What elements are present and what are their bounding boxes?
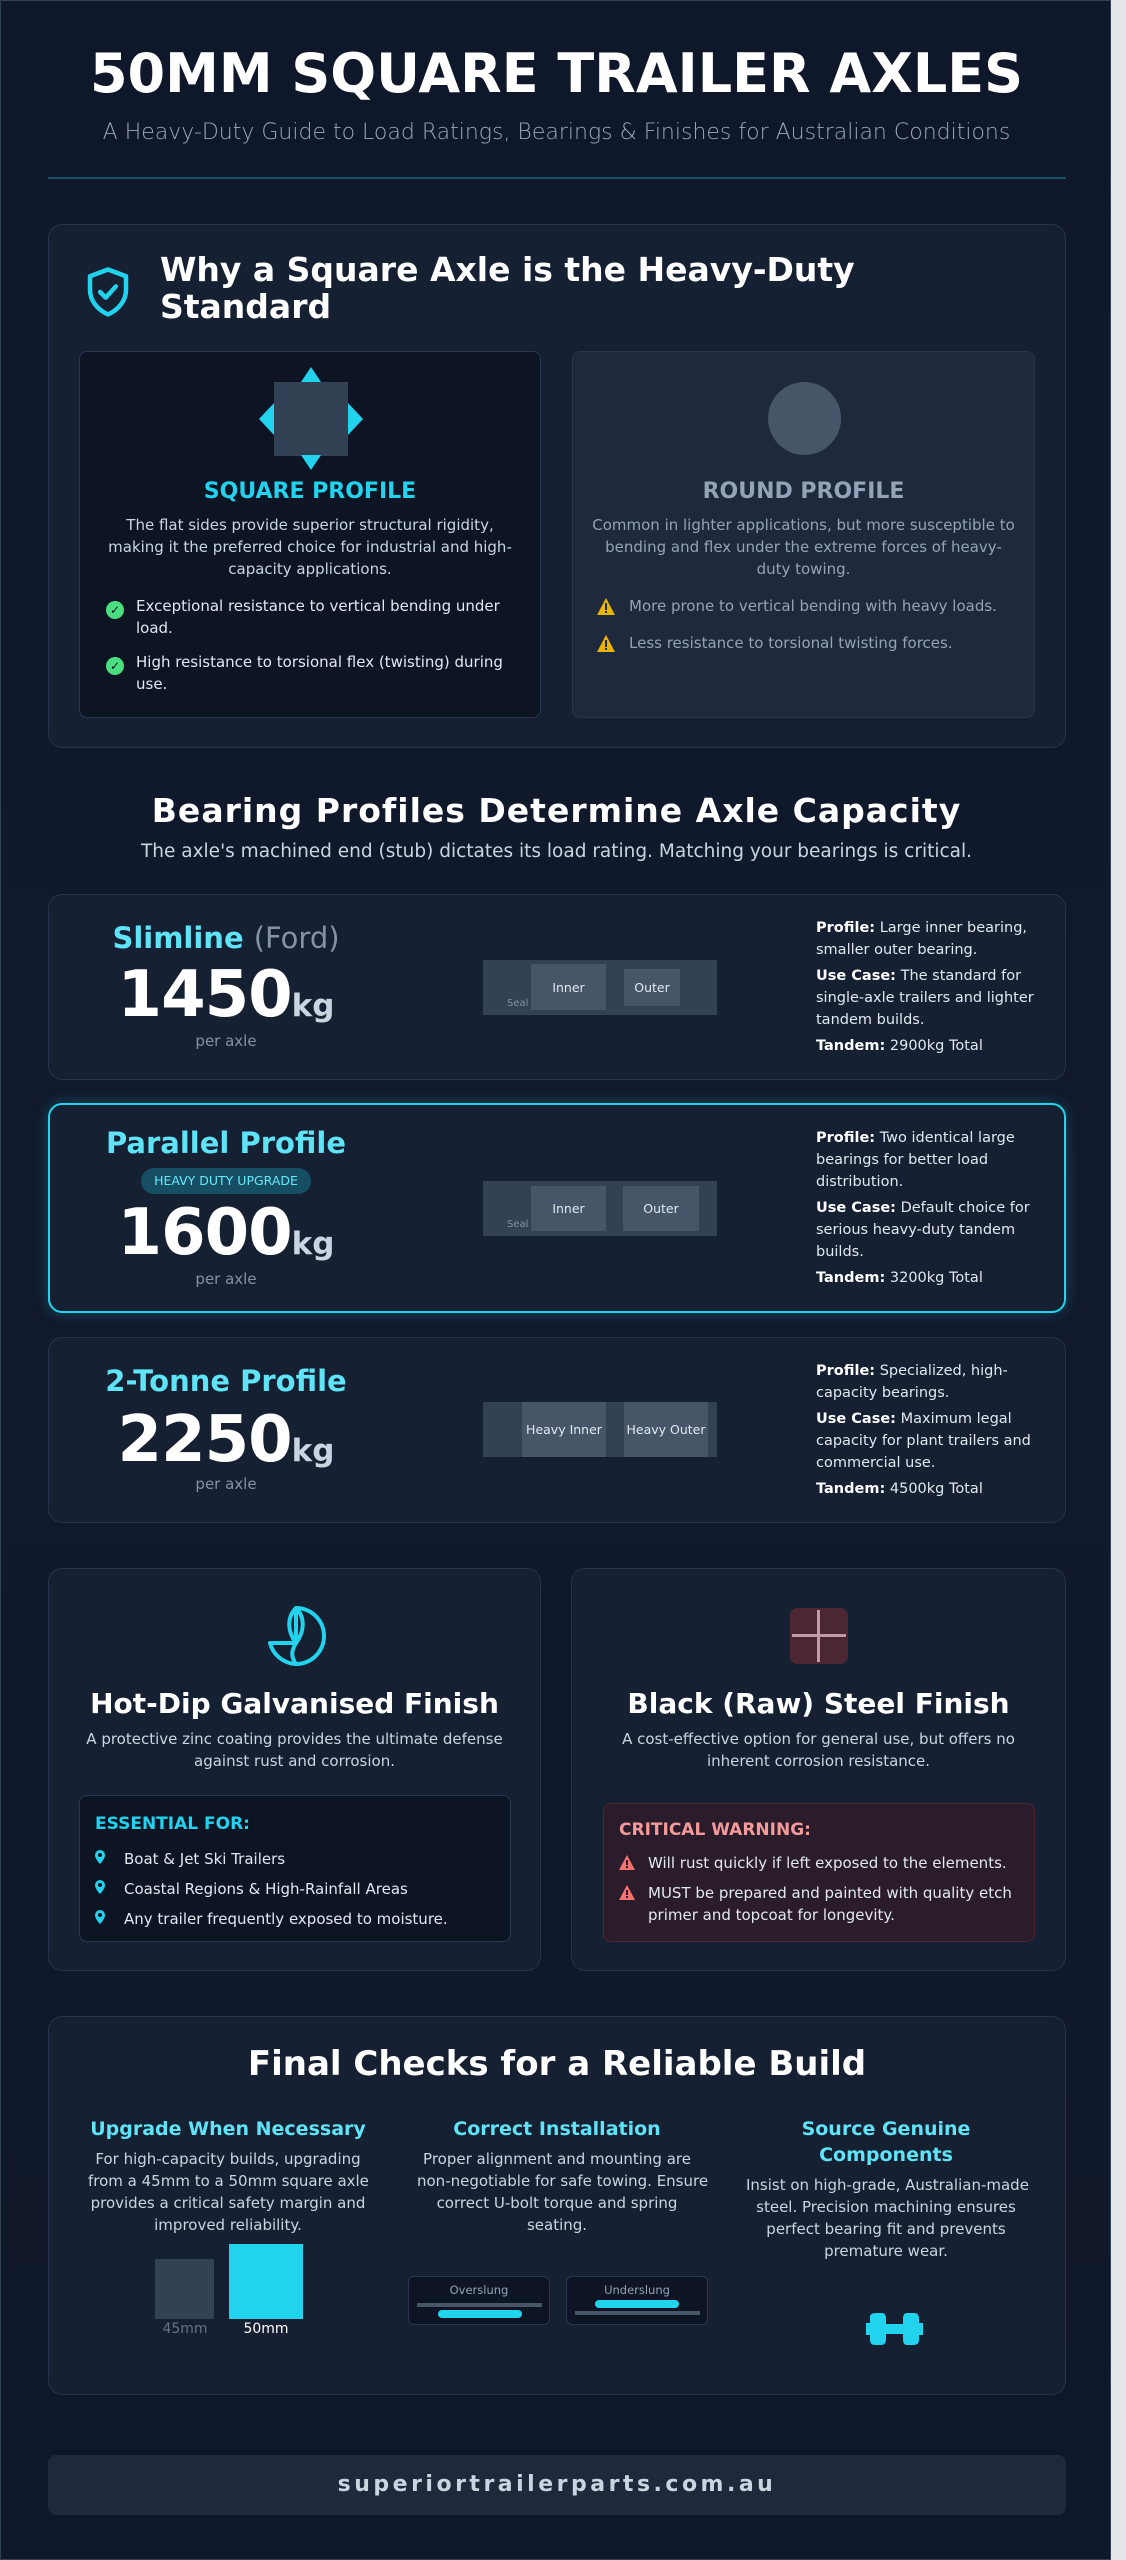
- box: essential for: [79, 1795, 511, 1942]
- text: Outer: [643, 1201, 679, 1216]
- text: smaller outer bearing. Use Case: The standard for: [816, 942, 1021, 984]
- heading: round profile: ROUND PROFILE: [703, 479, 904, 504]
- column: upgrade: For high-capacity builds, upgrading: [95, 2150, 361, 2168]
- panel: why square axle: [48, 224, 1066, 748]
- text: Heavy Inner: [526, 1422, 602, 1437]
- diagram: overslung: Overslung: [450, 2283, 508, 2297]
- icon: component: [866, 2313, 923, 2345]
- column: genuine: steel. Precision machining ensures: [756, 2198, 1016, 2216]
- text: 1600kg: [118, 1196, 334, 1270]
- diagram: overslung: [408, 2276, 550, 2325]
- text: single-axle trailers and lighter: [816, 990, 1034, 1006]
- bullets: [597, 597, 997, 652]
- badge: HEAVY DUTY UPGRADE: [154, 1173, 298, 1188]
- column: upgrade: provides a critical safety margin and: [91, 2194, 365, 2212]
- column: installation: Proper alignment and mounting are: [423, 2150, 691, 2168]
- icon: square with arrows: [259, 367, 363, 470]
- column: upgrade: [88, 2118, 369, 2337]
- column: genuine: Source Genuine: [802, 2118, 970, 2140]
- text: Slimline (Ford): [112, 921, 340, 955]
- text: The flat sides provide superior structural rigidity,: [126, 516, 494, 534]
- footer: superiortrailerparts.com.au: [338, 2472, 776, 2497]
- title: 50MM SQUARE TRAILER AXLES: [90, 42, 1023, 105]
- column: upgrade: Upgrade When Necessary: [90, 2118, 366, 2140]
- text: per axle: [195, 1032, 257, 1050]
- heading: Final Checks for a Reliable Build: [248, 2044, 866, 2084]
- column: genuine: Components: [819, 2144, 953, 2166]
- badge: [141, 1168, 311, 1194]
- text: inherent corrosion resistance.: [707, 1752, 930, 1770]
- diagram: Inner: [552, 980, 585, 994]
- column: genuine: Insist on high-grade, Australian-made: [746, 2176, 1029, 2194]
- text: making it the preferred choice for industrial and high-: [108, 538, 512, 556]
- heading: square profile: SQUARE PROFILE: [204, 479, 416, 504]
- column: installation: [408, 2118, 708, 2325]
- text: bending and flex under the extreme forces of heavy-: [605, 538, 1002, 556]
- bullets: [106, 597, 503, 693]
- column: genuine: premature wear.: [824, 2242, 948, 2260]
- text: builds. Tandem: 3200kg Total: [816, 1244, 983, 1286]
- text: A cost-effective option for general use, but offers no: [622, 1730, 1015, 1748]
- column: upgrade: from a 45mm to a 50mm square axle: [88, 2172, 369, 2190]
- bullets: Exceptional resistance to vertical bending under: [136, 597, 500, 615]
- heading: Standard: [160, 287, 331, 326]
- text: Parallel Profile: [106, 1126, 346, 1160]
- text: A protective zinc coating provides the ultimate defense: [86, 1730, 503, 1748]
- text: 2-Tonne Profile: [105, 1364, 347, 1398]
- bullets: load.: [136, 619, 173, 637]
- column: upgrade: 50mm: [243, 2321, 289, 2337]
- text: [108, 516, 512, 578]
- box: essential for: Coastal Regions & High-Rainfall Areas: [124, 1880, 408, 1898]
- text: Seal: [507, 1219, 528, 1230]
- column: installation: seating.: [527, 2216, 587, 2234]
- text: commercial use. Tandem: 4500kg Total: [816, 1455, 983, 1497]
- text: capacity for plant trailers and: [816, 1433, 1031, 1449]
- icon: shield: [88, 267, 128, 317]
- box: critical warning: Will rust quickly if left exposed to the elements.: [648, 1854, 1007, 1872]
- text: capacity bearings. Use Case: Maximum legal: [816, 1385, 1012, 1427]
- heading: Why a Square Axle is the Heavy-Duty: [160, 250, 855, 289]
- text: Heavy Outer: [626, 1422, 706, 1437]
- text: capacity applications.: [228, 560, 392, 578]
- text: 2250kg: [118, 1403, 334, 1477]
- card: round profile: [572, 351, 1035, 718]
- text: Inner: [552, 1201, 585, 1216]
- heading: Black (Raw) Steel Finish: [627, 1687, 1010, 1720]
- text: [86, 1730, 503, 1770]
- panel: galvanised: [48, 1568, 541, 1971]
- diagram: Outer: [634, 980, 670, 995]
- bullets: ✓: [110, 603, 120, 617]
- icon: raw steel: [790, 1608, 848, 1664]
- column: installation: Correct Installation: [453, 2118, 661, 2140]
- card: parallel: [48, 1103, 1066, 1313]
- card: square profile: [79, 351, 541, 718]
- box: critical warning: MUST be prepared and painted with quality etch: [648, 1884, 1012, 1902]
- card: 2-tonne: [48, 1337, 1066, 1523]
- text: 1450kg: [118, 958, 334, 1032]
- diagram: [483, 960, 717, 1015]
- text: distribution. Use Case: Default choice for: [816, 1174, 1030, 1216]
- text: duty towing.: [757, 560, 850, 578]
- text: [592, 516, 1015, 578]
- diagram: underslung: Underslung: [604, 2283, 670, 2297]
- text: bearings for better load: [816, 1152, 988, 1168]
- heading: Hot-Dip Galvanised Finish: [90, 1687, 499, 1720]
- bullets: use.: [136, 675, 167, 693]
- column: upgrade: improved reliability.: [154, 2216, 302, 2234]
- text: tandem builds. Tandem: 2900kg Total: [816, 1012, 983, 1054]
- footer: [48, 2455, 1066, 2515]
- text: Profile: Two identical large: [816, 1130, 1015, 1146]
- text: Profile: Large inner bearing,: [816, 920, 1027, 936]
- bullets: Less resistance to torsional twisting forces.: [629, 634, 953, 652]
- diagram: Seal: [507, 998, 528, 1009]
- panel: black steel: [571, 1568, 1066, 1971]
- box: critical warning: CRITICAL WARNING:: [619, 1820, 811, 1840]
- box: critical warning: [603, 1803, 1035, 1942]
- text: per axle: [195, 1270, 257, 1288]
- diagram: underslung: [566, 2276, 708, 2325]
- box: essential for: ESSENTIAL FOR:: [95, 1814, 250, 1834]
- card: slimline: [48, 894, 1066, 1080]
- text: Profile: Specialized, high-: [816, 1363, 1008, 1379]
- bullets: ✓: [110, 659, 120, 673]
- section subtitle: The axle's machined end (stub) dictates its load rating. Matching your bearings is critical.: [141, 841, 972, 862]
- text: serious heavy-duty tandem: [816, 1222, 1015, 1238]
- chart: 45 vs 50mm: [155, 2259, 214, 2319]
- text: Common in lighter applications, but more susceptible to: [592, 516, 1015, 534]
- section heading: Bearing Profiles Determine Axle Capacity: [152, 791, 961, 830]
- box: essential for: Any trailer frequently exposed to moisture.: [124, 1910, 448, 1928]
- column: installation: correct U-bolt torque and spring: [437, 2194, 677, 2212]
- panel: final checks: [48, 2016, 1066, 2395]
- heading: [160, 250, 855, 326]
- bullets: High resistance to torsional flex (twisting) during: [136, 653, 503, 671]
- text: [622, 1730, 1015, 1770]
- subtitle: A Heavy-Duty Guide to Load Ratings, Bearings & Finishes for Australian Conditions: [103, 120, 1010, 145]
- bullets: More prone to vertical bending with heavy loads.: [629, 597, 997, 615]
- box: essential for: Boat & Jet Ski Trailers: [124, 1850, 285, 1868]
- icon: circle: [768, 382, 841, 455]
- text: against rust and corrosion.: [194, 1752, 395, 1770]
- icon: galvanised leaf: [268, 1606, 326, 1666]
- column: upgrade: 45mm: [162, 2321, 208, 2337]
- column: installation: non-negotiable for safe towing. Ensure: [417, 2172, 708, 2190]
- column: genuine: perfect bearing fit and prevents: [766, 2220, 1006, 2238]
- box: critical warning: primer and topcoat for longevity.: [648, 1906, 895, 1924]
- text: per axle: [195, 1475, 257, 1493]
- column: genuine: [746, 2118, 1029, 2345]
